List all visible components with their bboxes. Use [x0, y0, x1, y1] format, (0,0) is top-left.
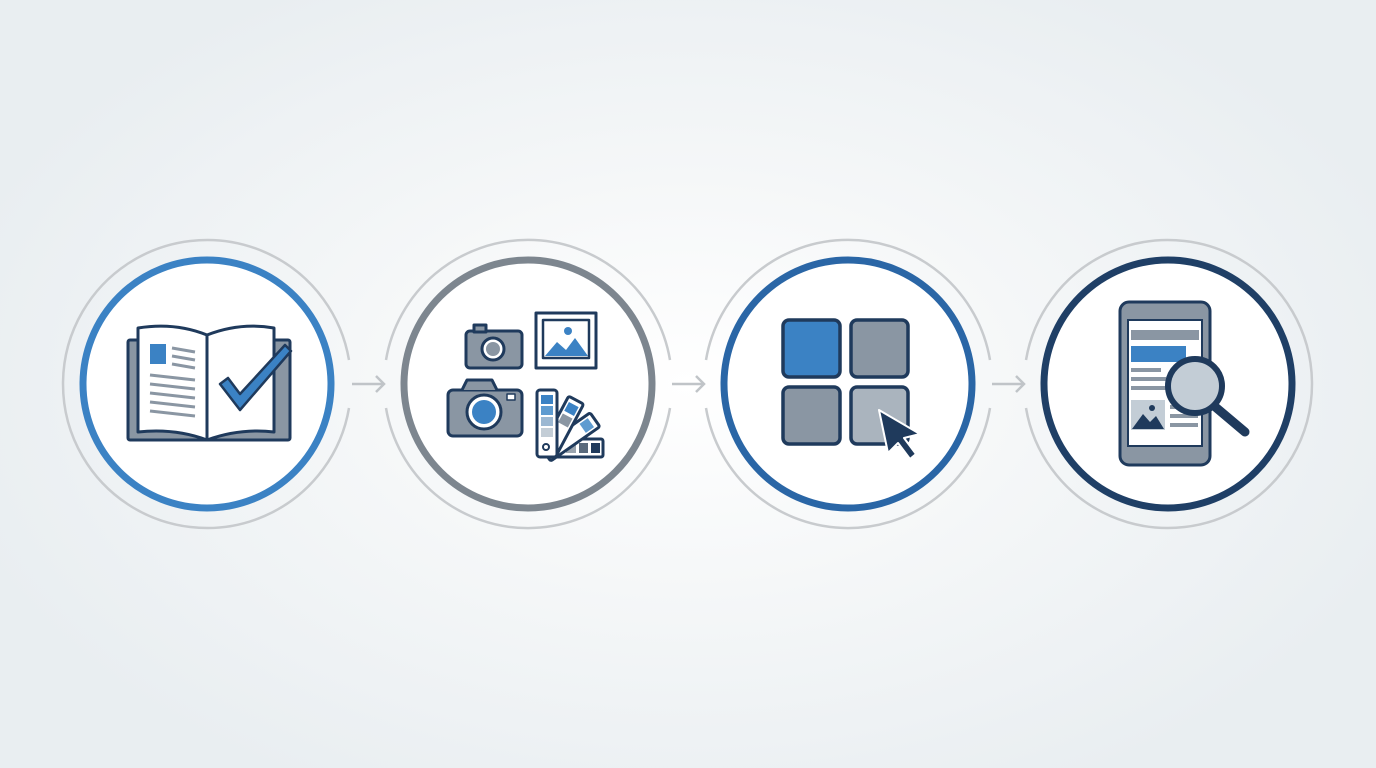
- icon: phone with magnifier: [1120, 302, 1245, 465]
- icon: grid with cursor: [783, 320, 920, 459]
- icon: cameras, photo, swatches: [448, 313, 603, 461]
- arrow 3: [992, 376, 1024, 392]
- step 3: selection grid circle: [706, 240, 990, 528]
- icon: open book with checkmark: [128, 326, 291, 440]
- step 4: mobile preview circle: [1026, 240, 1312, 528]
- step 2: media assets circle: [386, 240, 670, 528]
- arrow 2: [672, 376, 704, 392]
- step 1: content review circle: [63, 240, 349, 528]
- arrow 1: [352, 376, 384, 392]
